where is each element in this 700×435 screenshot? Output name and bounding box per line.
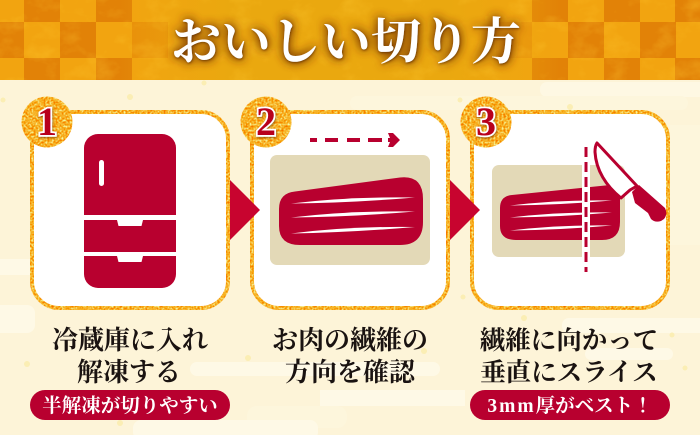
cutting board [270,155,430,265]
badge: 1 [22,96,72,148]
text: step 3 caption: 垂直にスライス [480,358,658,387]
meat with grain [500,185,620,240]
badge: 2 [240,96,292,148]
text: step 3 caption [480,326,658,387]
title: おいしい切り方 [171,14,521,70]
callout: half-thawed tip [30,390,230,420]
badge: 2: 2 [256,99,276,144]
text: step 2 caption [272,326,428,387]
text: step 2 caption: 方向を確認 [285,358,417,387]
title: おいしい切り方 [171,14,521,70]
cutting board [492,165,625,257]
arrow: step 1 to 2 [230,180,260,240]
panel: step 2 check grain direction [252,112,448,308]
badge: 3 [460,96,512,148]
cut gap [582,160,590,260]
badge: 1: 1 [37,99,57,144]
text: step 1 caption: 解凍する [77,358,181,387]
text: step 1 caption: 冷蔵庫に入れ [52,326,208,355]
arrow: step 2 to 3 [450,180,480,240]
text: step 2 caption: お肉の繊維の [272,326,428,355]
title: おいしい切り方 [171,14,521,70]
icon: knife [595,143,666,222]
text: step 1 caption [52,326,208,387]
icon: refrigerator [84,134,176,288]
meat with grain [279,177,423,245]
icon: dashed direction arrow [310,133,400,147]
callout: thickness tip: 3mm厚がベスト！ [487,395,653,417]
callout: thickness tip [470,390,670,420]
callout: half-thawed tip: 半解凍が切りやすい [42,394,218,417]
header band: gold checker [0,0,700,80]
text: step 3 caption: 繊維に向かって [480,326,658,355]
cut line [584,147,588,272]
panel: step 1 refrigerator [32,112,228,308]
panel: step 3 slice [472,112,668,308]
badge: 3: 3 [476,99,496,144]
